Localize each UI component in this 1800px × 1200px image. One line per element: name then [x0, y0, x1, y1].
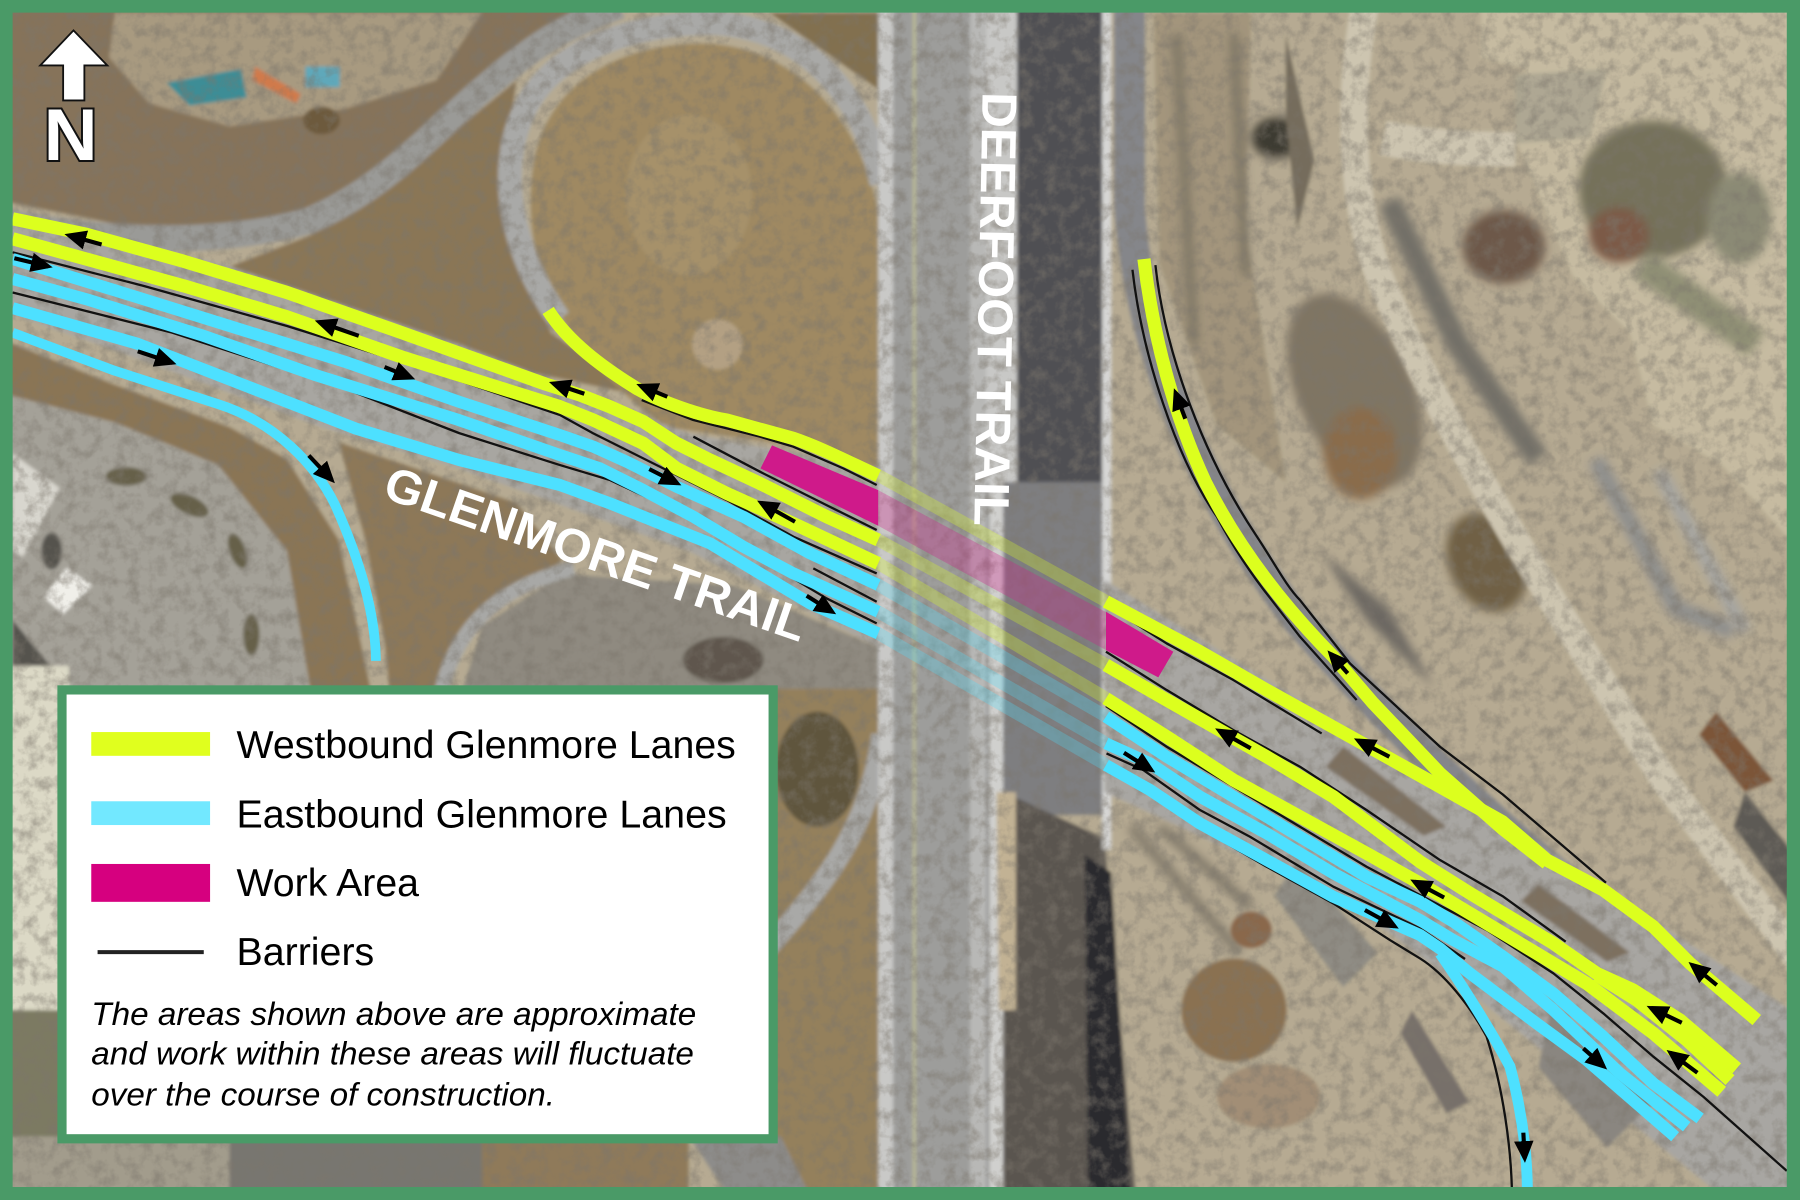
- legend panel: [62, 690, 773, 1139]
- lots south of legend: [0, 1136, 241, 1200]
- arrow: eastbound 8: [1583, 1048, 1604, 1066]
- east ramp road: [1130, 0, 1800, 1068]
- swatch: barriers: [98, 950, 204, 954]
- translucent lanes over Deerfoot Trail: [878, 475, 1107, 765]
- north-east lighter image tile: [1481, 0, 1800, 551]
- icon: arrow up: [40, 30, 107, 100]
- arrow: eastbound 7: [1365, 910, 1395, 926]
- arrow: westbound 8: [1692, 965, 1717, 985]
- rubble south of Glenmore: [459, 574, 882, 700]
- arrow: eastbound 2: [138, 351, 172, 363]
- arrow: eastbound 1: [14, 258, 48, 266]
- arrow: westbound ramp: [641, 386, 667, 397]
- south-east furrows: [1131, 827, 1251, 953]
- north arrow: [40, 30, 107, 176]
- arrow: westbound 5: [1219, 731, 1251, 748]
- arrow: westbound 3: [553, 383, 584, 394]
- swatch: work area: [91, 864, 210, 902]
- road: loop ramp: [510, 23, 882, 319]
- arrow: eastbound 6: [1124, 753, 1151, 770]
- arrow: westbound 4: [761, 503, 795, 522]
- east field junk rows: [1389, 201, 1538, 459]
- field: north-west: [0, 0, 620, 235]
- field: between road and loop: [230, 80, 643, 396]
- label: eastbound: Eastbound Glenmore Lanes: [236, 794, 727, 837]
- Deerfoot Trail east carriageway: [1017, 0, 1104, 488]
- yard equipment: [166, 69, 247, 106]
- field: south of legend right: [758, 689, 884, 1200]
- north-east vegetation and yard debris: [1578, 121, 1728, 258]
- road: north-west ramp: [0, 6, 620, 239]
- work area east of bridge: [1106, 612, 1173, 677]
- label: westbound: Westbound Glenmore Lanes: [236, 724, 736, 767]
- swatch: westbound: [91, 732, 210, 756]
- parking lot: [0, 393, 312, 700]
- wedge between Glenmore and off-ramp: [339, 442, 562, 700]
- Glenmore corridor west: [0, 209, 882, 649]
- arrow: ramp north: [1176, 393, 1185, 419]
- arrow: westbound 10: [1670, 1053, 1697, 1073]
- arrow: westbound 2: [319, 322, 359, 336]
- arrow: eastbound off-ramp: [309, 456, 332, 480]
- yard: north-west dusty area: [109, 13, 482, 126]
- road: south-west ramp: [758, 735, 882, 959]
- work area west of bridge: [761, 445, 878, 526]
- strip west of legend: [0, 666, 69, 1010]
- grass strip south of Glenmore: [0, 339, 373, 700]
- dirt pile south-east: [1181, 959, 1287, 1062]
- arrow: eastbound 5: [807, 596, 832, 612]
- road label: Glenmore Trail: GLENMORE TRAIL: [378, 456, 814, 652]
- field: cloverleaf interior: [530, 43, 882, 471]
- field: north of loop corner: [769, 13, 882, 92]
- arrow: ramp south: [1330, 654, 1348, 673]
- westbound lanes: [13, 219, 1757, 1092]
- swatch: eastbound: [91, 801, 210, 825]
- corridor brown strips: [1326, 746, 1446, 836]
- note: The areas shown above are approximate: [91, 996, 696, 1032]
- note: over the course of construction.: [91, 1076, 555, 1112]
- arrow: eastbound 3: [385, 367, 411, 378]
- barriers: [13, 252, 1787, 1188]
- diagonal dirt track: [1354, 0, 1800, 964]
- arrow: westbound 9: [1651, 1008, 1682, 1023]
- arrow: westbound 1: [69, 235, 102, 245]
- road label: Deerfoot Trail: DEERFOOT TRAIL: [963, 92, 1027, 527]
- Glenmore corridor east: [1104, 580, 1800, 1200]
- arrow: westbound 6: [1358, 740, 1389, 757]
- label: barriers: Barriers: [236, 931, 374, 974]
- note: and work within these areas will fluctuate: [91, 1036, 694, 1072]
- eastbound lanes: [13, 259, 1700, 1188]
- arrow: westbound 7: [1414, 882, 1444, 898]
- note: [91, 996, 696, 1112]
- label: work area: Work Area: [236, 862, 419, 905]
- direction arrows: [14, 235, 1717, 1158]
- east fields dark patches: [1154, 13, 1286, 482]
- arrow: eastbound 4: [649, 469, 677, 483]
- Deerfoot Trail west carriageway: [878, 0, 1014, 1200]
- arrow: south ramp: [1523, 1133, 1525, 1158]
- south-east rust patch: [1699, 712, 1774, 792]
- N letter: N: [44, 93, 98, 176]
